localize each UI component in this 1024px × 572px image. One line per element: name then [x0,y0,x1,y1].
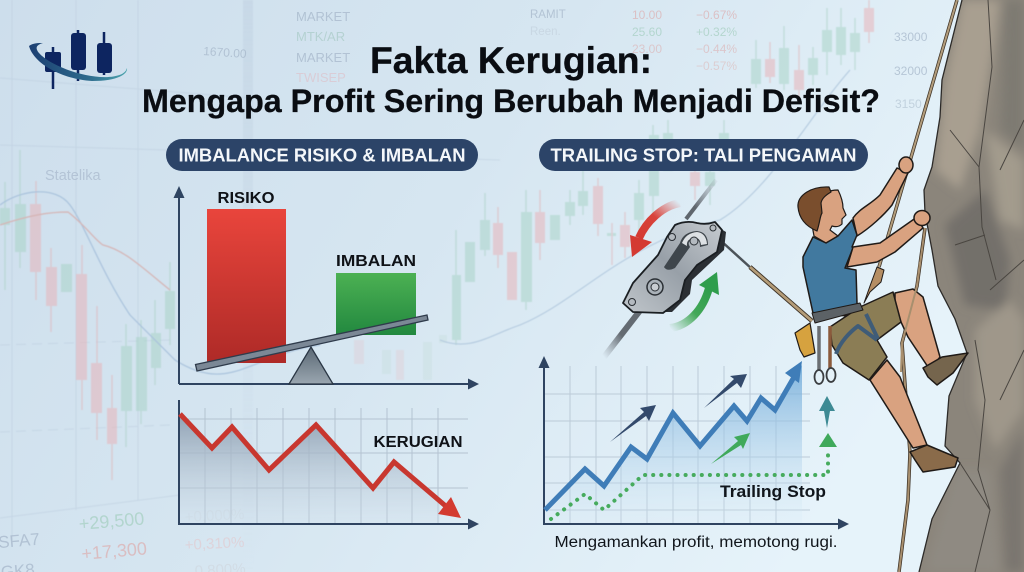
rope through device [604,180,812,357]
background ticker text: 32000 [894,64,928,78]
main climbing rope [879,0,957,267]
shirt [803,220,860,317]
icon: belay device [623,222,726,313]
upper leg and knee [895,289,940,370]
seesaw beam [196,315,428,371]
background ticker text: +17,300 [81,538,148,564]
upper shoe [923,353,968,385]
label: kerugian: KERUGIAN [374,434,462,451]
title [142,40,880,119]
background ticker text: 3150 [895,97,922,111]
raised arm [853,168,908,236]
label: trailing stop: Trailing Stop [720,482,826,501]
background ticker text: MARKET [296,50,350,65]
carabiners [814,326,836,384]
panel heading: trailing stop [539,139,868,171]
chart: risk reward balance [174,186,479,390]
lower shoe [910,445,958,472]
hand upper [899,157,913,173]
rope over knee [901,262,920,372]
loss line arrow [180,414,448,508]
background ticker text: 23.00 [632,42,662,56]
background ticker text: MARKET [296,9,350,24]
background ticker text: 33000 [894,30,928,44]
background ticker text: Reen. [530,26,561,38]
background ticker text: +0,000% [184,506,245,526]
background ticker text: −0.67% [696,8,737,22]
lower arm [847,217,923,267]
background ticker text: +29,500 [78,508,145,534]
background ticker text: −0.57% [696,59,737,73]
background ticker text: +0,310% [184,534,245,554]
dark trend arrow one [610,405,656,442]
price line arrow [545,377,794,510]
label: imbalan: IMBALAN [336,253,416,270]
risk bar [207,209,286,363]
belay knot [864,267,884,303]
teal up arrow [819,396,835,428]
chart: trailing stop [538,356,849,551]
hand lower [914,210,930,226]
green trend arrow [711,433,750,464]
reward bar [336,273,416,335]
dark trend arrow two [704,374,747,408]
trailing stop dotted line [551,448,828,519]
caption: Mengamankan profit, memotong rugi. [554,534,838,551]
background ticker text: TWISEP [296,70,346,85]
background ticker text: RAMIT [530,9,566,21]
logo icon [29,30,127,89]
background ticker text: +0.32% [696,25,737,39]
arrow: green upward [670,272,719,328]
shorts [830,292,901,380]
chart: loss [179,400,479,530]
arrow: red downward [630,203,680,257]
background ticker text: −0.44% [696,42,737,56]
label: risiko: RISIKO [218,190,274,207]
background ticker text: Statelika [45,168,102,184]
panel heading: trailing stop: TRAILING STOP: TALI PENGAMAN [550,146,856,166]
background ticker text: 1670.00 [203,44,247,61]
background ticker text: 10.00 [632,8,662,22]
illustration: climber [795,157,968,472]
chalk bag [795,323,815,357]
face and neck [812,190,846,243]
rock wall [919,0,1024,572]
hanging rope [899,228,925,572]
background ticker text: MTK/AR [296,29,345,44]
title: Mengapa Profit Sering Berubah Menjadi Defisit? [142,83,880,119]
panel heading: imbalance [166,139,478,171]
lower leg [870,360,927,448]
harness belt [812,303,863,323]
fulcrum [289,347,333,384]
background ticker text: 25.60 [632,25,662,39]
leg loop [836,314,878,354]
panel heading: imbalance: IMBALANCE RISIKO & IMBALAN [178,146,466,166]
hair [798,187,831,231]
title: Fakta Kerugian: [370,40,652,81]
